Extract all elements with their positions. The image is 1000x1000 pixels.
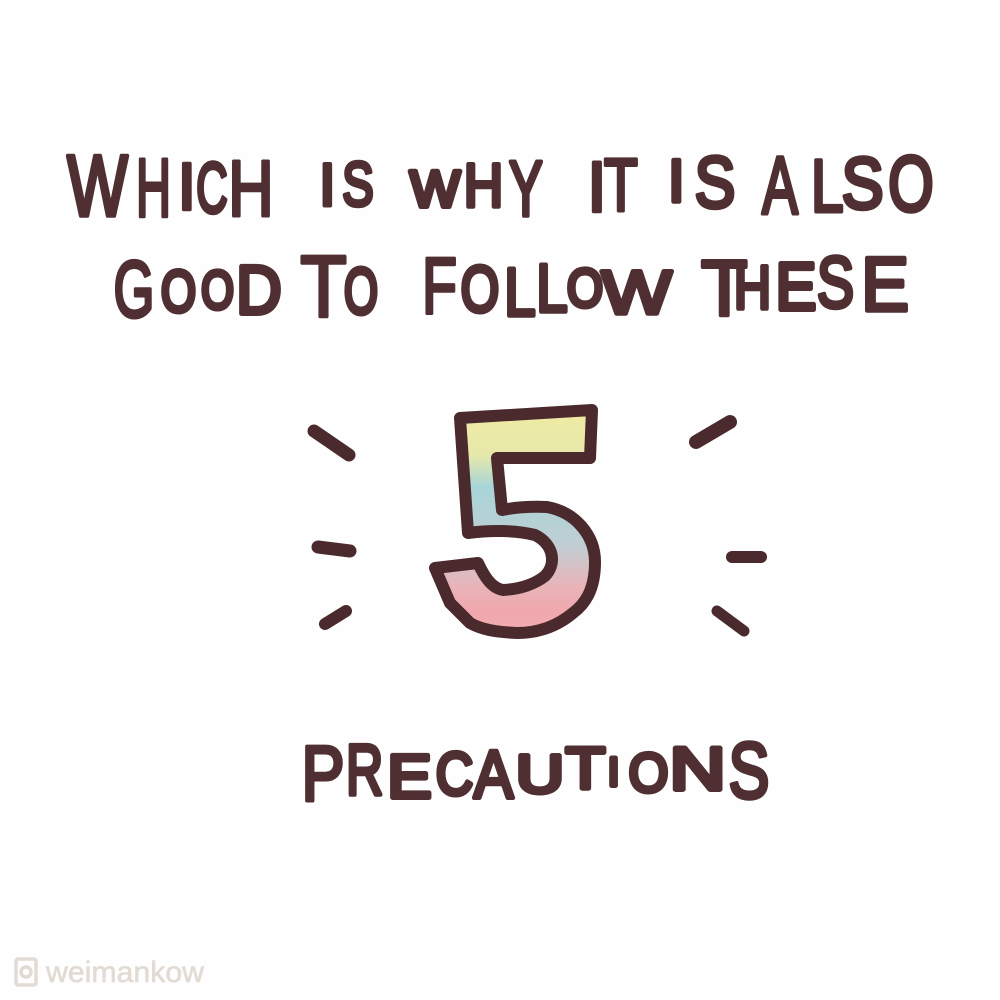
title line 1: T [604, 144, 638, 226]
title line 2: H [734, 254, 771, 322]
title line 2: O [201, 260, 234, 320]
title line 1: I [319, 152, 336, 218]
tick: upper left [314, 431, 349, 455]
title line 1: H [136, 142, 171, 234]
title line 2: O [567, 258, 603, 318]
title line 1: S [842, 144, 884, 224]
title line 2: W [602, 258, 672, 326]
tick: lower right [717, 611, 744, 631]
title line 2: O [161, 260, 196, 324]
title line 1: H [464, 152, 503, 220]
tick: middle left [318, 547, 350, 551]
title line 1: H [228, 144, 274, 232]
word: precautions [302, 726, 769, 818]
title line 2: E [776, 250, 816, 324]
title line 2: L [504, 254, 536, 330]
word: precautions: P [302, 730, 344, 818]
title line 1: O [888, 140, 934, 228]
title line 2: T [701, 244, 748, 332]
tick: upper right [696, 422, 730, 442]
title [67, 138, 934, 336]
word: precautions: C [436, 740, 473, 808]
title line 1: C [196, 150, 228, 228]
word: precautions: O [629, 742, 668, 804]
title line 1: I [178, 150, 196, 224]
handle text: weimankow [45, 956, 204, 989]
watermark: instagram handle [16, 956, 204, 989]
emphasis ticks [314, 422, 761, 631]
title line 2: O [344, 254, 378, 328]
word: precautions: E [387, 742, 432, 810]
word: precautions: U [516, 744, 564, 804]
title line 1: I [587, 148, 607, 228]
title line 2 [114, 238, 909, 336]
big number 5 [435, 410, 595, 633]
title line 1: A [762, 140, 798, 232]
title line 1: S [342, 150, 374, 220]
word: precautions: T [566, 736, 605, 802]
title line 1: I [668, 148, 685, 214]
title line 2: S [817, 244, 854, 324]
title line 2: G [114, 244, 154, 334]
title line 2: O [461, 252, 499, 326]
title line 2: E [861, 242, 909, 328]
word: precautions: I [608, 750, 619, 794]
title line 1 [67, 138, 934, 234]
word: precautions: S [729, 726, 769, 814]
word: precautions: R [346, 732, 383, 810]
number outline and gradient fill [435, 410, 595, 633]
title line 1: W [410, 160, 460, 218]
title line 2: D [236, 252, 282, 328]
word: precautions: N [670, 736, 726, 802]
title line 1: Y [509, 144, 543, 232]
tick: middle right [732, 551, 761, 563]
title line 1: L [811, 144, 844, 228]
title line 2: T [300, 238, 347, 336]
tick: lower left [325, 611, 346, 624]
title line 1: S [695, 144, 735, 224]
title line 2: F [422, 242, 457, 330]
title line 2: L [536, 250, 568, 326]
word: precautions: A [474, 736, 514, 812]
icon: instagram logo [16, 959, 36, 985]
title line 1: W [67, 138, 128, 234]
